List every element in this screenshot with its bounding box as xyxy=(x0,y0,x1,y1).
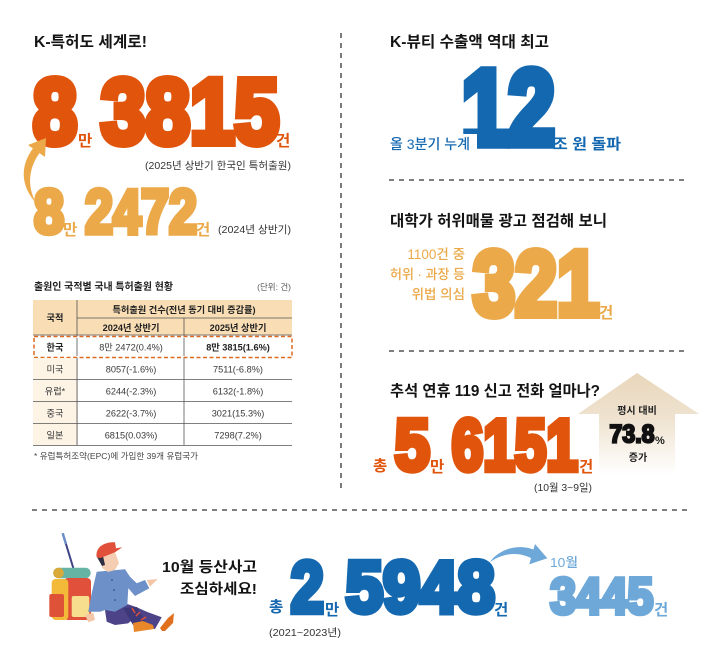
table rows: other countries: 6815(0.03%) xyxy=(105,430,157,440)
text: 1100 cases xyxy=(390,247,465,302)
callout: compared to normal: 증가 xyxy=(629,451,647,464)
arrow: to October xyxy=(490,544,547,564)
text: hiking accidents xyxy=(162,559,257,598)
table header xyxy=(33,300,292,445)
illustration: hiker with backpack xyxy=(49,533,174,632)
label: October: 10월 xyxy=(550,555,578,570)
text: 1100 cases: 허위 · 과장 등 xyxy=(390,267,465,282)
figure: 25948 accidents: 만 xyxy=(325,601,339,619)
table row: Korea highlighted: 8만 3815(1.6%) xyxy=(206,342,270,352)
figure: 56151 calls: 건 xyxy=(579,458,593,476)
table rows: other countries: 2622(-3.7%) xyxy=(106,408,156,418)
figure: 321: 321 xyxy=(473,233,599,335)
table rows: other countries: 중국 xyxy=(47,408,63,418)
table footnote: * 유럽특허조약(EPC)에 가입한 39개 유럽국가 xyxy=(34,450,198,461)
table rows: other countries: 미국 xyxy=(47,364,63,374)
table header: 2025년 상반기 xyxy=(210,322,266,333)
callout: compared to normal: % xyxy=(655,435,665,447)
figure: 2025 patent applications: 건 xyxy=(276,132,290,150)
figure: 25948 accidents: 2 xyxy=(291,548,324,628)
table row: Korea highlighted xyxy=(34,336,292,358)
callout: compared to normal xyxy=(610,404,665,464)
table rows: other countries: 6244(-2.3%) xyxy=(106,386,156,396)
figure: 56151 calls: 5 xyxy=(395,406,430,486)
figure: 2024 patent applications: 2472 xyxy=(85,178,197,247)
panel: Chuseok 119 calls xyxy=(373,373,699,494)
arrow: growth from 2024 to 2025 xyxy=(24,138,46,203)
figure: 56151 calls: 6151 xyxy=(452,406,578,486)
figure: 2025 patent applications: 만 xyxy=(78,132,92,150)
table rows: other countries: 7511(-6.8%) xyxy=(213,364,263,374)
label: cases: 건 xyxy=(654,601,668,619)
table unit: (단위: 건) xyxy=(257,282,291,292)
figure: 2025 patent applications: 3815 xyxy=(101,61,279,163)
table rows: other countries xyxy=(33,358,292,446)
table rows: other countries: 8057(-1.6%) xyxy=(106,364,156,374)
table rows: other countries: 3021(15.3%) xyxy=(212,408,264,418)
callout: compared to normal: 73.8 xyxy=(610,420,655,448)
panel: K-patent total xyxy=(24,33,291,247)
figure: 56151 calls: 총 xyxy=(373,457,387,475)
table header: 2024년 상반기 xyxy=(103,322,159,333)
heading: K-patent: K-특허도 세계로! xyxy=(34,33,147,51)
icon: up arrow xyxy=(578,373,699,475)
panel: patent table xyxy=(33,280,292,461)
panel: mountain accidents xyxy=(49,533,668,639)
figure: 56151 calls: 만 xyxy=(430,458,444,476)
caption: years: (2021~2023년) xyxy=(269,627,341,639)
heading: 119 calls: 추석 연휴 119 신고 전화 얼마나? xyxy=(390,382,600,400)
label: won: 조 원 돌파 xyxy=(553,136,621,153)
callout: compared to normal: 평시 대비 xyxy=(617,404,657,417)
table header: 국적 xyxy=(47,312,63,323)
figure: 12 trillion won: 12 xyxy=(462,49,555,167)
table title: 출원인 국적별 국내 특허출원 현황 xyxy=(34,280,173,293)
table rows: other countries: 6132(-1.8%) xyxy=(213,386,263,396)
table row: Korea highlighted: 8만 2472(0.4%) xyxy=(99,342,163,352)
figure: 25948 accidents: 총 xyxy=(269,598,283,616)
figure: 56151 calls xyxy=(373,406,593,486)
heading: university: 대학가 허위매물 광고 점검해 보니 xyxy=(390,212,607,230)
caption: 2024: (2024년 상반기) xyxy=(218,224,291,236)
figure: 25948 accidents xyxy=(269,548,508,628)
table rows: other countries: 7298(7.2%) xyxy=(214,430,262,440)
label: cases: 건 xyxy=(599,304,613,322)
figure: 25948 accidents: 5948 xyxy=(346,548,495,628)
figure: 2024 patent applications: 8 xyxy=(34,178,64,247)
panel: K-beauty exports xyxy=(390,33,621,167)
table rows: other countries: 유럽* xyxy=(45,386,66,396)
caption: 2025: (2025년 상반기 한국인 특허출원) xyxy=(145,160,291,172)
figure: 2025 patent applications: 8 xyxy=(33,61,77,163)
figure: 2024 patent applications: 만 xyxy=(63,221,77,239)
figure: 2024 patent applications: 건 xyxy=(196,221,210,239)
figure: 3445: 3445 xyxy=(550,568,653,624)
table rows: other countries: 일본 xyxy=(47,430,63,440)
figure: 2025 patent applications xyxy=(33,61,290,163)
heading: K-beauty: K-뷰티 수출액 역대 최고 xyxy=(390,33,549,51)
text: 1100 cases: 위법 의심 xyxy=(412,287,465,302)
label: cumulative: 올 3분기 누계 xyxy=(390,136,470,152)
text: 1100 cases: 1100건 중 xyxy=(407,247,465,262)
caption: dates: (10월 3~9일) xyxy=(534,481,592,494)
text: hiking accidents: 조심하세요! xyxy=(180,581,257,598)
table header: 특허출원 건수(전년 동기 대비 증감률) xyxy=(112,304,256,315)
figure: 2024 patent applications xyxy=(34,178,210,247)
figure: 25948 accidents: 건 xyxy=(494,601,508,619)
panel: university rental ads xyxy=(390,212,613,335)
text: hiking accidents: 10월 등산사고 xyxy=(162,559,257,576)
table row: Korea highlighted: 한국 xyxy=(47,342,64,352)
